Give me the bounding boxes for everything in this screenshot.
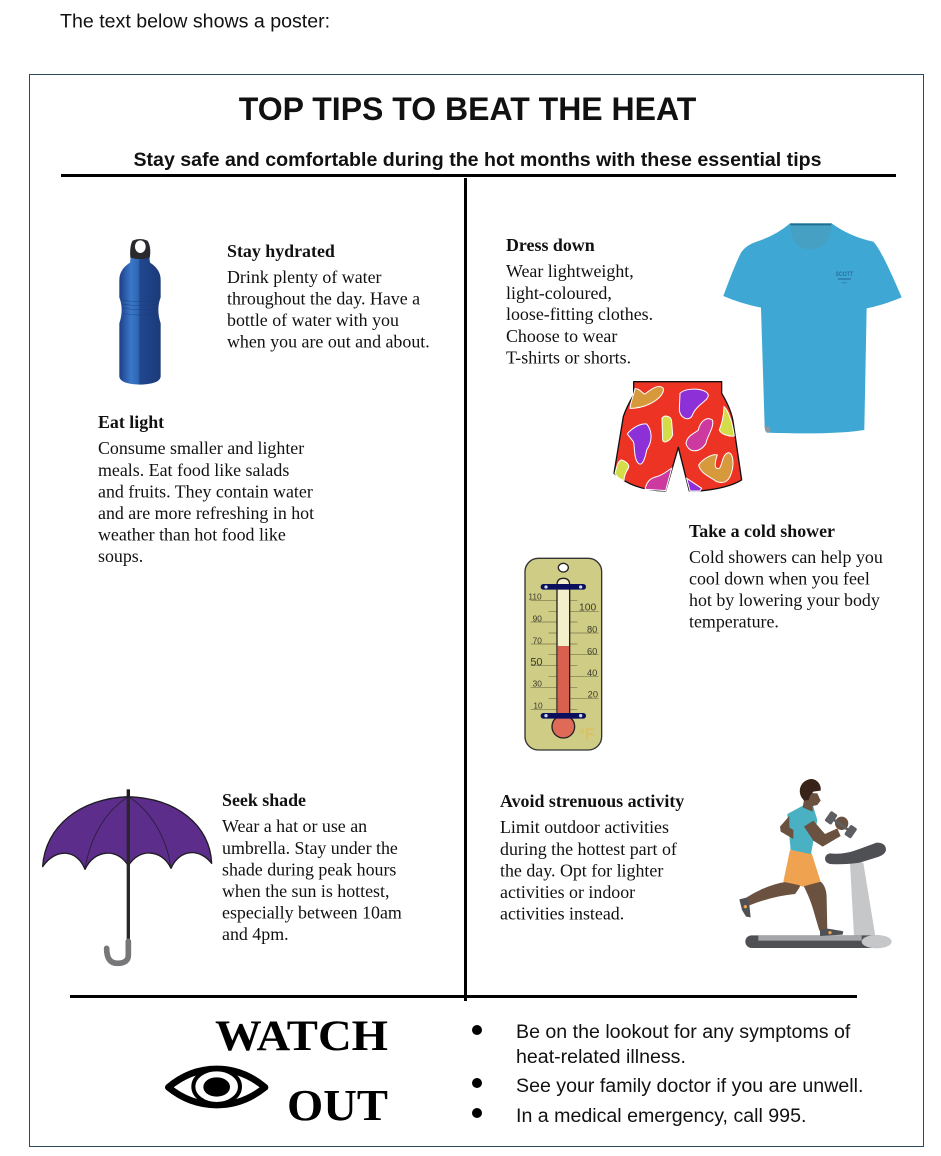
icon: thermometer: 50 bbox=[530, 656, 543, 668]
tip: stay hydrated: Stay hydrated bbox=[227, 241, 335, 261]
icon: thermometer: 60 bbox=[587, 646, 597, 656]
icon: thermometer: 90 bbox=[533, 613, 542, 623]
tip: take a cold shower: hot by lowering your body bbox=[689, 590, 880, 610]
icon: thermometer: 30 bbox=[533, 679, 542, 689]
tip: avoid strenuous activity: Avoid strenuous activity bbox=[500, 791, 684, 811]
watch out list: In a medical emergency, call 995. bbox=[516, 1105, 806, 1127]
tip: seek shade: especially between 10am bbox=[222, 902, 402, 922]
tip: stay hydrated bbox=[227, 241, 430, 352]
icon: water bottle bbox=[119, 239, 161, 385]
icon: umbrella bbox=[43, 789, 212, 963]
watch out heading: OUT bbox=[287, 1081, 388, 1130]
tip: seek shade: umbrella. Stay under the bbox=[222, 838, 398, 858]
icon: t-shirt: SCOTT bbox=[836, 271, 853, 278]
tip: eat light: and are more refreshing in hot bbox=[98, 503, 314, 523]
tip: avoid strenuous activity: Limit outdoor activities bbox=[500, 817, 669, 837]
tip: seek shade: Wear a hat or use an bbox=[222, 816, 367, 836]
tip: avoid strenuous activity: activities or indoor bbox=[500, 882, 635, 902]
tip: eat light: and fruits. They contain water bbox=[98, 482, 313, 502]
tip: take a cold shower bbox=[689, 521, 883, 632]
tip: eat light: meals. Eat food like salads bbox=[98, 460, 289, 480]
tip: take a cold shower: temperature. bbox=[689, 612, 779, 632]
tip: dress down: Choose to wear bbox=[506, 326, 617, 346]
watch out list: Be on the lookout for any symptoms of bbox=[516, 1021, 851, 1043]
watch out heading: WATCH bbox=[215, 1013, 388, 1060]
tip: avoid strenuous activity: the day. Opt for lighter bbox=[500, 860, 663, 880]
tip: dress down: Wear lightweight, bbox=[506, 261, 634, 281]
icon: thermometer bbox=[525, 558, 602, 750]
tip: dress down: loose-fitting clothes. bbox=[506, 304, 653, 324]
icon: t-shirt bbox=[723, 223, 902, 433]
tip: eat light: weather than hot food like bbox=[98, 524, 286, 544]
tip: take a cold shower: Take a cold shower bbox=[689, 521, 835, 541]
icon: thermometer: 70 bbox=[533, 635, 542, 645]
tip: avoid strenuous activity bbox=[500, 791, 684, 924]
tip: stay hydrated: throughout the day. Have a bbox=[227, 288, 420, 308]
tip: seek shade: when the sun is hottest, bbox=[222, 881, 389, 901]
tip: take a cold shower: Cold showers can help you bbox=[689, 547, 883, 567]
title: TOP TIPS TO BEAT THE HEAT bbox=[239, 91, 697, 127]
tip: stay hydrated: Drink plenty of water bbox=[227, 267, 382, 287]
icon: thermometer: 10 bbox=[533, 701, 543, 711]
icon: thermometer: °F bbox=[579, 726, 595, 743]
tip: seek shade: Seek shade bbox=[222, 790, 306, 810]
watch out heading bbox=[215, 1013, 388, 1130]
icon: thermometer: 100 bbox=[579, 603, 596, 614]
tip: eat light bbox=[98, 412, 314, 566]
watch out list: heat-related illness. bbox=[516, 1046, 686, 1068]
tip: avoid strenuous activity: during the hottest part of bbox=[500, 839, 677, 859]
tip: seek shade: shade during peak hours bbox=[222, 860, 396, 880]
icon: thermometer: 80 bbox=[587, 624, 597, 634]
tip: stay hydrated: when you are out and about. bbox=[227, 332, 430, 352]
tip: eat light: Eat light bbox=[98, 412, 164, 432]
tip: stay hydrated: bottle of water with you bbox=[227, 310, 399, 330]
watch out list: See your family doctor if you are unwell. bbox=[516, 1075, 863, 1097]
icon: runner on treadmill bbox=[739, 779, 892, 948]
tip: dress down: light-coloured, bbox=[506, 283, 612, 303]
tip: dress down: Dress down bbox=[506, 235, 595, 255]
icon: thermometer: 20 bbox=[588, 690, 598, 700]
tip: eat light: soups. bbox=[98, 546, 143, 566]
icon: eye bbox=[168, 1069, 265, 1105]
tip: dress down bbox=[506, 235, 653, 368]
tip: dress down: T-shirts or shorts. bbox=[506, 348, 631, 368]
tip: take a cold shower: cool down when you feel bbox=[689, 568, 870, 588]
icon: thermometer: 110 bbox=[528, 592, 542, 602]
tip: avoid strenuous activity: activities instead. bbox=[500, 904, 624, 924]
watch out list bbox=[472, 1021, 863, 1127]
intro line: The text below shows a poster: bbox=[60, 10, 330, 32]
tip: seek shade bbox=[222, 790, 402, 944]
tip: seek shade: and 4pm. bbox=[222, 924, 289, 944]
tip: eat light: Consume smaller and lighter bbox=[98, 438, 304, 458]
icon: shorts bbox=[614, 382, 742, 491]
subtitle: Stay safe and comfortable during the hot months with these essential tips bbox=[133, 149, 822, 171]
icon: thermometer: 40 bbox=[587, 668, 597, 678]
